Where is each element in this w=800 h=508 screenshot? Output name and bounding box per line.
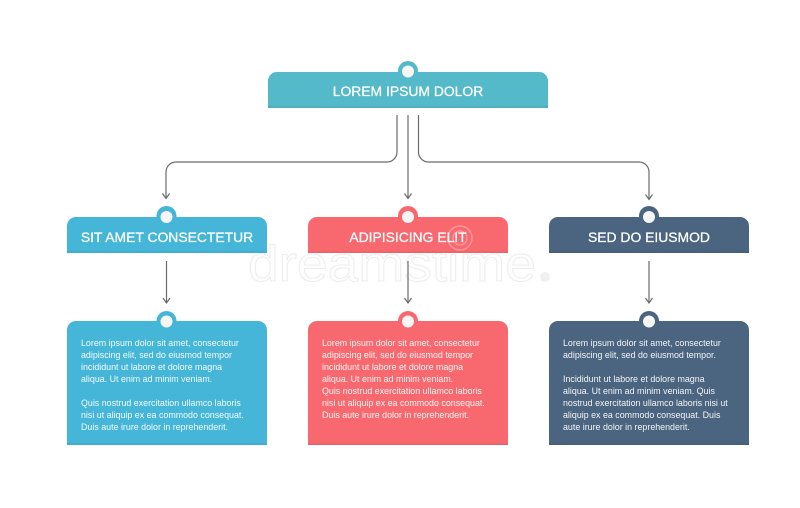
blue body text [81, 338, 244, 432]
connector: to right column [418, 115, 652, 200]
icon: red text node [398, 311, 418, 331]
blue body text: Duis aute irure dolor in reprehenderit. [81, 422, 228, 432]
blue body text: Quis nostrud exercitation ullamco laboris [81, 398, 241, 408]
blue heading text: SIT AMET CONSECTETUR [81, 229, 253, 245]
panel: red heading [308, 206, 508, 253]
red body text: adipiscing elit, sed do eiusmod tempor [322, 350, 473, 360]
top box: Lorem ipsum dolor [268, 61, 548, 108]
panel: navy heading [549, 206, 749, 253]
red body text: nisi ut aliquip ex ea commodo consequat. [322, 398, 485, 408]
red heading text: ADIPISICING ELIT [349, 229, 467, 245]
arrow: navy heading to text [646, 261, 652, 303]
red body text: Lorem ipsum dolor sit amet, consectetur [322, 338, 480, 348]
navy body text: nostrud exercitation ullamco laboris nisi ut [563, 398, 728, 408]
red body text: Duis aute irure dolor in reprehenderit. [322, 410, 469, 420]
panel: blue heading [67, 206, 267, 253]
navy heading text: SED DO EIUSMOD [588, 229, 710, 245]
watermark: dreamstime [248, 236, 536, 292]
panel: navy text [549, 311, 749, 445]
panel: blue text [67, 311, 267, 445]
navy body text: aute irure dolor in reprehenderit. [563, 422, 690, 432]
blue body text: aliqua. Ut enim ad minim veniam. [81, 374, 212, 384]
panel: red text [308, 311, 508, 445]
icon: top node [398, 61, 418, 81]
blue body text: incididunt ut labore et dolore magna [81, 362, 222, 372]
icon: navy node [639, 206, 659, 226]
navy body text [563, 338, 728, 432]
navy body text: Lorem ipsum dolor sit amet, consectetur [563, 338, 721, 348]
connector: to middle column [404, 115, 412, 198]
navy body text: aliqua. Ut enim ad minim veniam. Quis [563, 386, 715, 396]
icon: blue node [156, 206, 176, 226]
top heading: LOREM IPSUM DOLOR [333, 83, 483, 99]
red body text [322, 338, 485, 420]
blue body text: nisi ut aliquip ex ea commodo consequat. [81, 410, 244, 420]
watermark logo [448, 226, 472, 250]
connector: to left column [162, 115, 397, 198]
icon: navy text node [639, 311, 659, 331]
arrow: red heading to text [404, 261, 412, 303]
arrow: blue heading to text [163, 261, 170, 303]
icon: red node [398, 206, 418, 226]
navy body text: adipiscing elit, sed do eiusmod tempor. [563, 350, 716, 360]
red body text: aliqua. Ut enim ad minim veniam. [322, 374, 453, 384]
navy body text: aliquip ex ea commodo consequat. Duis [563, 410, 721, 420]
navy body text: Incididunt ut labore et dolore magna [563, 374, 705, 384]
blue body text: Lorem ipsum dolor sit amet, consectetur [81, 338, 239, 348]
icon: blue text node [156, 311, 176, 331]
red body text: incididunt ut labore et dolore magna [322, 362, 463, 372]
red body text: Quis nostrud exercitation ullamco laboris [322, 386, 482, 396]
blue body text: adipiscing elit, sed do eiusmod tempor [81, 350, 232, 360]
